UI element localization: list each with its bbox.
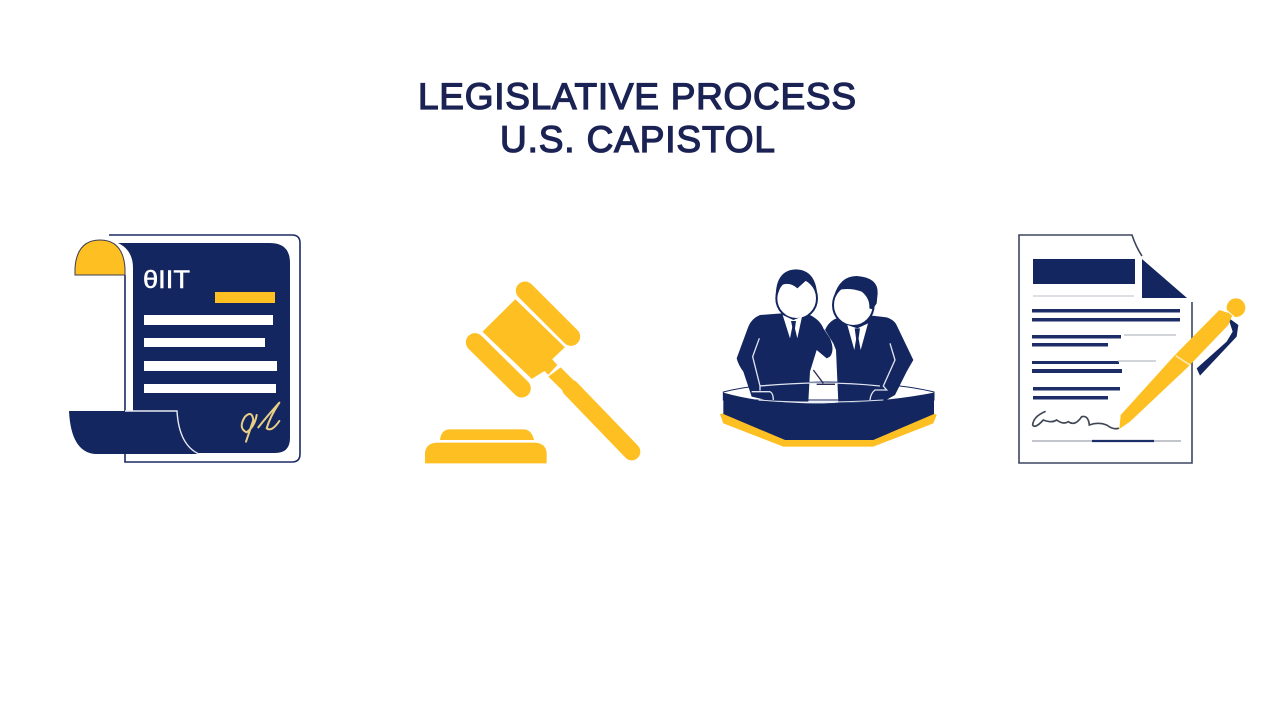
icon: signed document with pen [1019,235,1245,463]
left man [737,269,832,402]
icon: gavel [425,291,632,463]
icon: two men at a table [720,269,937,447]
icon: bill scroll [69,235,300,462]
table front [720,370,937,447]
right man [825,276,913,403]
title [418,76,856,160]
table interior [723,382,934,400]
title: U.S. CAPISTOL [500,119,775,160]
title: LEGISLATIVE PROCESS [418,76,856,117]
icon: bill scroll: θIIT [143,266,190,294]
